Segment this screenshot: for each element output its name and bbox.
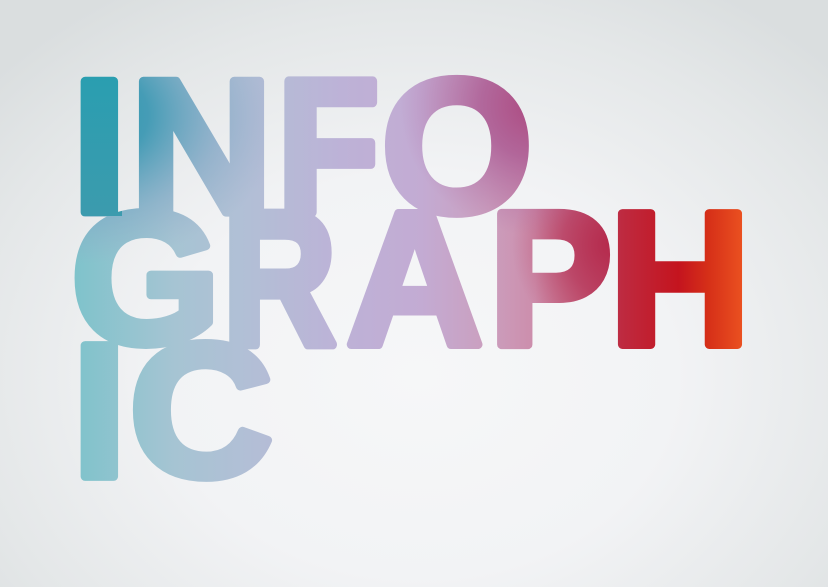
title: INFOGRAPHIC gradient lettering <box>70 70 746 486</box>
